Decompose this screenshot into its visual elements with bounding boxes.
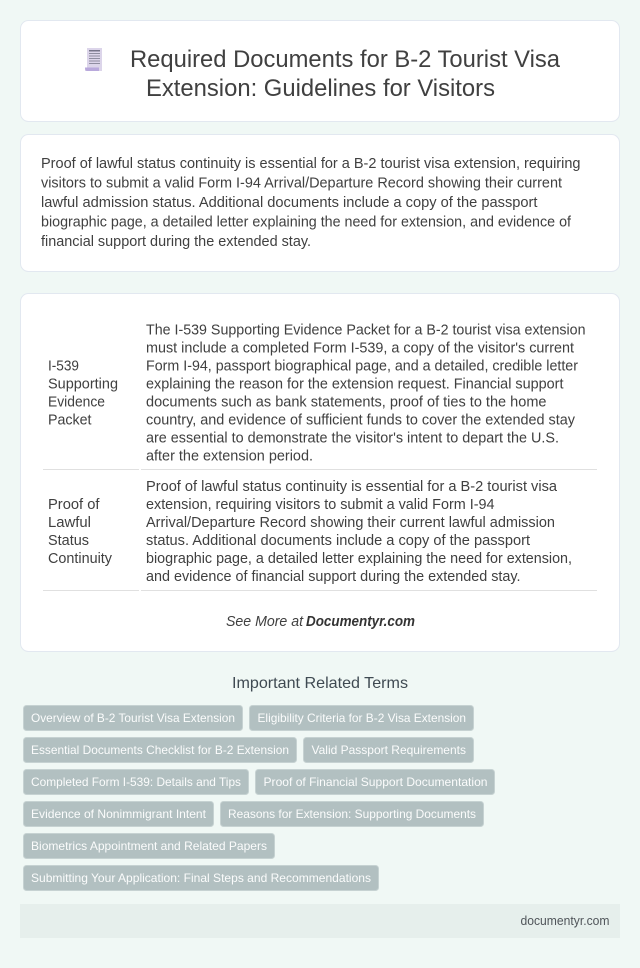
footer xyxy=(20,904,620,938)
chip: essential documents xyxy=(24,738,296,762)
chip: overview xyxy=(24,706,242,730)
text block: intro paragraph xyxy=(41,156,580,250)
row text: I-539 description: explaining the reason for the extension request. Financial support xyxy=(146,376,564,392)
row text: I-539 description: after the extension period. xyxy=(146,448,313,464)
row text: lawful status description: extension, requiring visitors to submit a valid Form I-94 xyxy=(146,497,494,513)
row text: I-539 description: are essential to demonstrate the visitor's intent to depart the U.S. xyxy=(146,430,559,446)
row label: I-539 Supporting Evidence Packet xyxy=(48,358,118,428)
row label: I-539 Supporting Evidence Packet: I-539 xyxy=(48,358,79,374)
see more link: See More at xyxy=(226,614,304,630)
row text: lawful status description: and evidence of financial support during the extended stay. xyxy=(146,569,520,585)
chip: biometrics xyxy=(24,834,274,858)
text block: intro paragraph: Proof of lawful status continuity is essential for a B-2 tourist visa extension, requiring xyxy=(41,156,580,172)
row text: I-539 description: The I-539 Supporting Evidence Packet for a B-2 tourist visa extension xyxy=(146,322,586,338)
panel: documents table xyxy=(20,294,620,652)
icon: document receipt xyxy=(85,48,102,71)
panel: title card xyxy=(20,20,620,122)
chip: essential documents: Essential Documents Checklist for B-2 Extension xyxy=(31,743,289,757)
row text: lawful status description: biographic page, a detailed letter explaining the need for extension, xyxy=(146,551,572,567)
row label: Proof of Lawful Status Continuity: Lawful xyxy=(48,515,91,531)
chip: nonimmigrant intent xyxy=(24,802,214,826)
chip: financial support xyxy=(256,770,494,794)
row label: I-539 Supporting Evidence Packet: Packet xyxy=(48,412,92,428)
chip: submitting: Submitting Your Application: Final Steps and Recommendations xyxy=(31,871,371,885)
chip: reasons xyxy=(220,802,484,826)
row text: I-539 description: documents such as bank statements, proof of ties to the home xyxy=(146,394,546,410)
row text: I-539 description: Form I-94, passport biographical page, and a detailed, credible letter xyxy=(146,358,578,374)
row text: I-539 description xyxy=(146,322,586,464)
chip: passport xyxy=(304,738,474,762)
chip: biometrics: Biometrics Appointment and Related Papers xyxy=(31,839,267,853)
chip: overview: Overview of B-2 Tourist Visa Extension xyxy=(31,711,235,725)
title: Required Documents for B-2 Tourist Visa xyxy=(130,46,561,73)
row text: lawful status description: Proof of lawful status continuity is essential for a B-2 tourist visa xyxy=(146,479,557,495)
chip: form I-539: Completed Form I-539: Details and Tips xyxy=(31,775,241,789)
row label: Proof of Lawful Status Continuity: Status xyxy=(48,533,89,549)
text block: intro paragraph: biographic page, a detailed letter explaining the need for extension, and evidence of xyxy=(41,214,572,230)
text block: intro paragraph: lawful admission status. Additional documents include a copy of the passport xyxy=(41,195,538,211)
row label: I-539 Supporting Evidence Packet: Supporting xyxy=(48,376,118,392)
chip: reasons: Reasons for Extension: Supporting Documents xyxy=(228,807,476,821)
chip: financial support: Proof of Financial Support Documentation xyxy=(264,775,488,789)
row text: lawful status description: status. Additional documents include a copy of the passport xyxy=(146,533,530,549)
chip: eligibility: Eligibility Criteria for B-2 Visa Extension xyxy=(258,711,466,725)
chip: submitting xyxy=(24,866,378,890)
title: Extension: Guidelines for Visitors xyxy=(146,75,495,102)
row text: I-539 description: country, and evidence of sufficient funds to cover the extended stay xyxy=(146,412,576,428)
title xyxy=(130,46,561,102)
related term chips xyxy=(24,706,494,890)
text block: intro paragraph: financial support during the extended stay. xyxy=(41,234,311,250)
see more link: Documentyr.com xyxy=(306,614,415,630)
chip: nonimmigrant intent: Evidence of Nonimmigrant Intent xyxy=(31,807,207,821)
row text: I-539 description: must include a completed Form I-539, a copy of the visitor's current xyxy=(146,340,574,356)
row label: Proof of Lawful Status Continuity xyxy=(48,497,113,567)
row label: I-539 Supporting Evidence Packet: Evidence xyxy=(48,394,105,410)
text block: intro paragraph: visitors to submit a valid Form I-94 Arrival/Departure Record showing their current xyxy=(41,176,562,192)
chip: form I-539 xyxy=(24,770,248,794)
footer: documentyr.com xyxy=(520,914,610,928)
row text: lawful status description xyxy=(146,479,572,585)
row text: lawful status description: Arrival/Departure Record showing their current lawful admission xyxy=(146,515,555,531)
row label: Proof of Lawful Status Continuity: Continuity xyxy=(48,551,113,567)
chip: passport: Valid Passport Requirements xyxy=(312,743,466,757)
see more link xyxy=(226,614,415,630)
panel: intro summary xyxy=(20,134,620,272)
heading: important related terms: Important Related Terms xyxy=(232,675,408,692)
chip: eligibility xyxy=(250,706,474,730)
row label: Proof of Lawful Status Continuity: Proof of xyxy=(48,497,101,513)
